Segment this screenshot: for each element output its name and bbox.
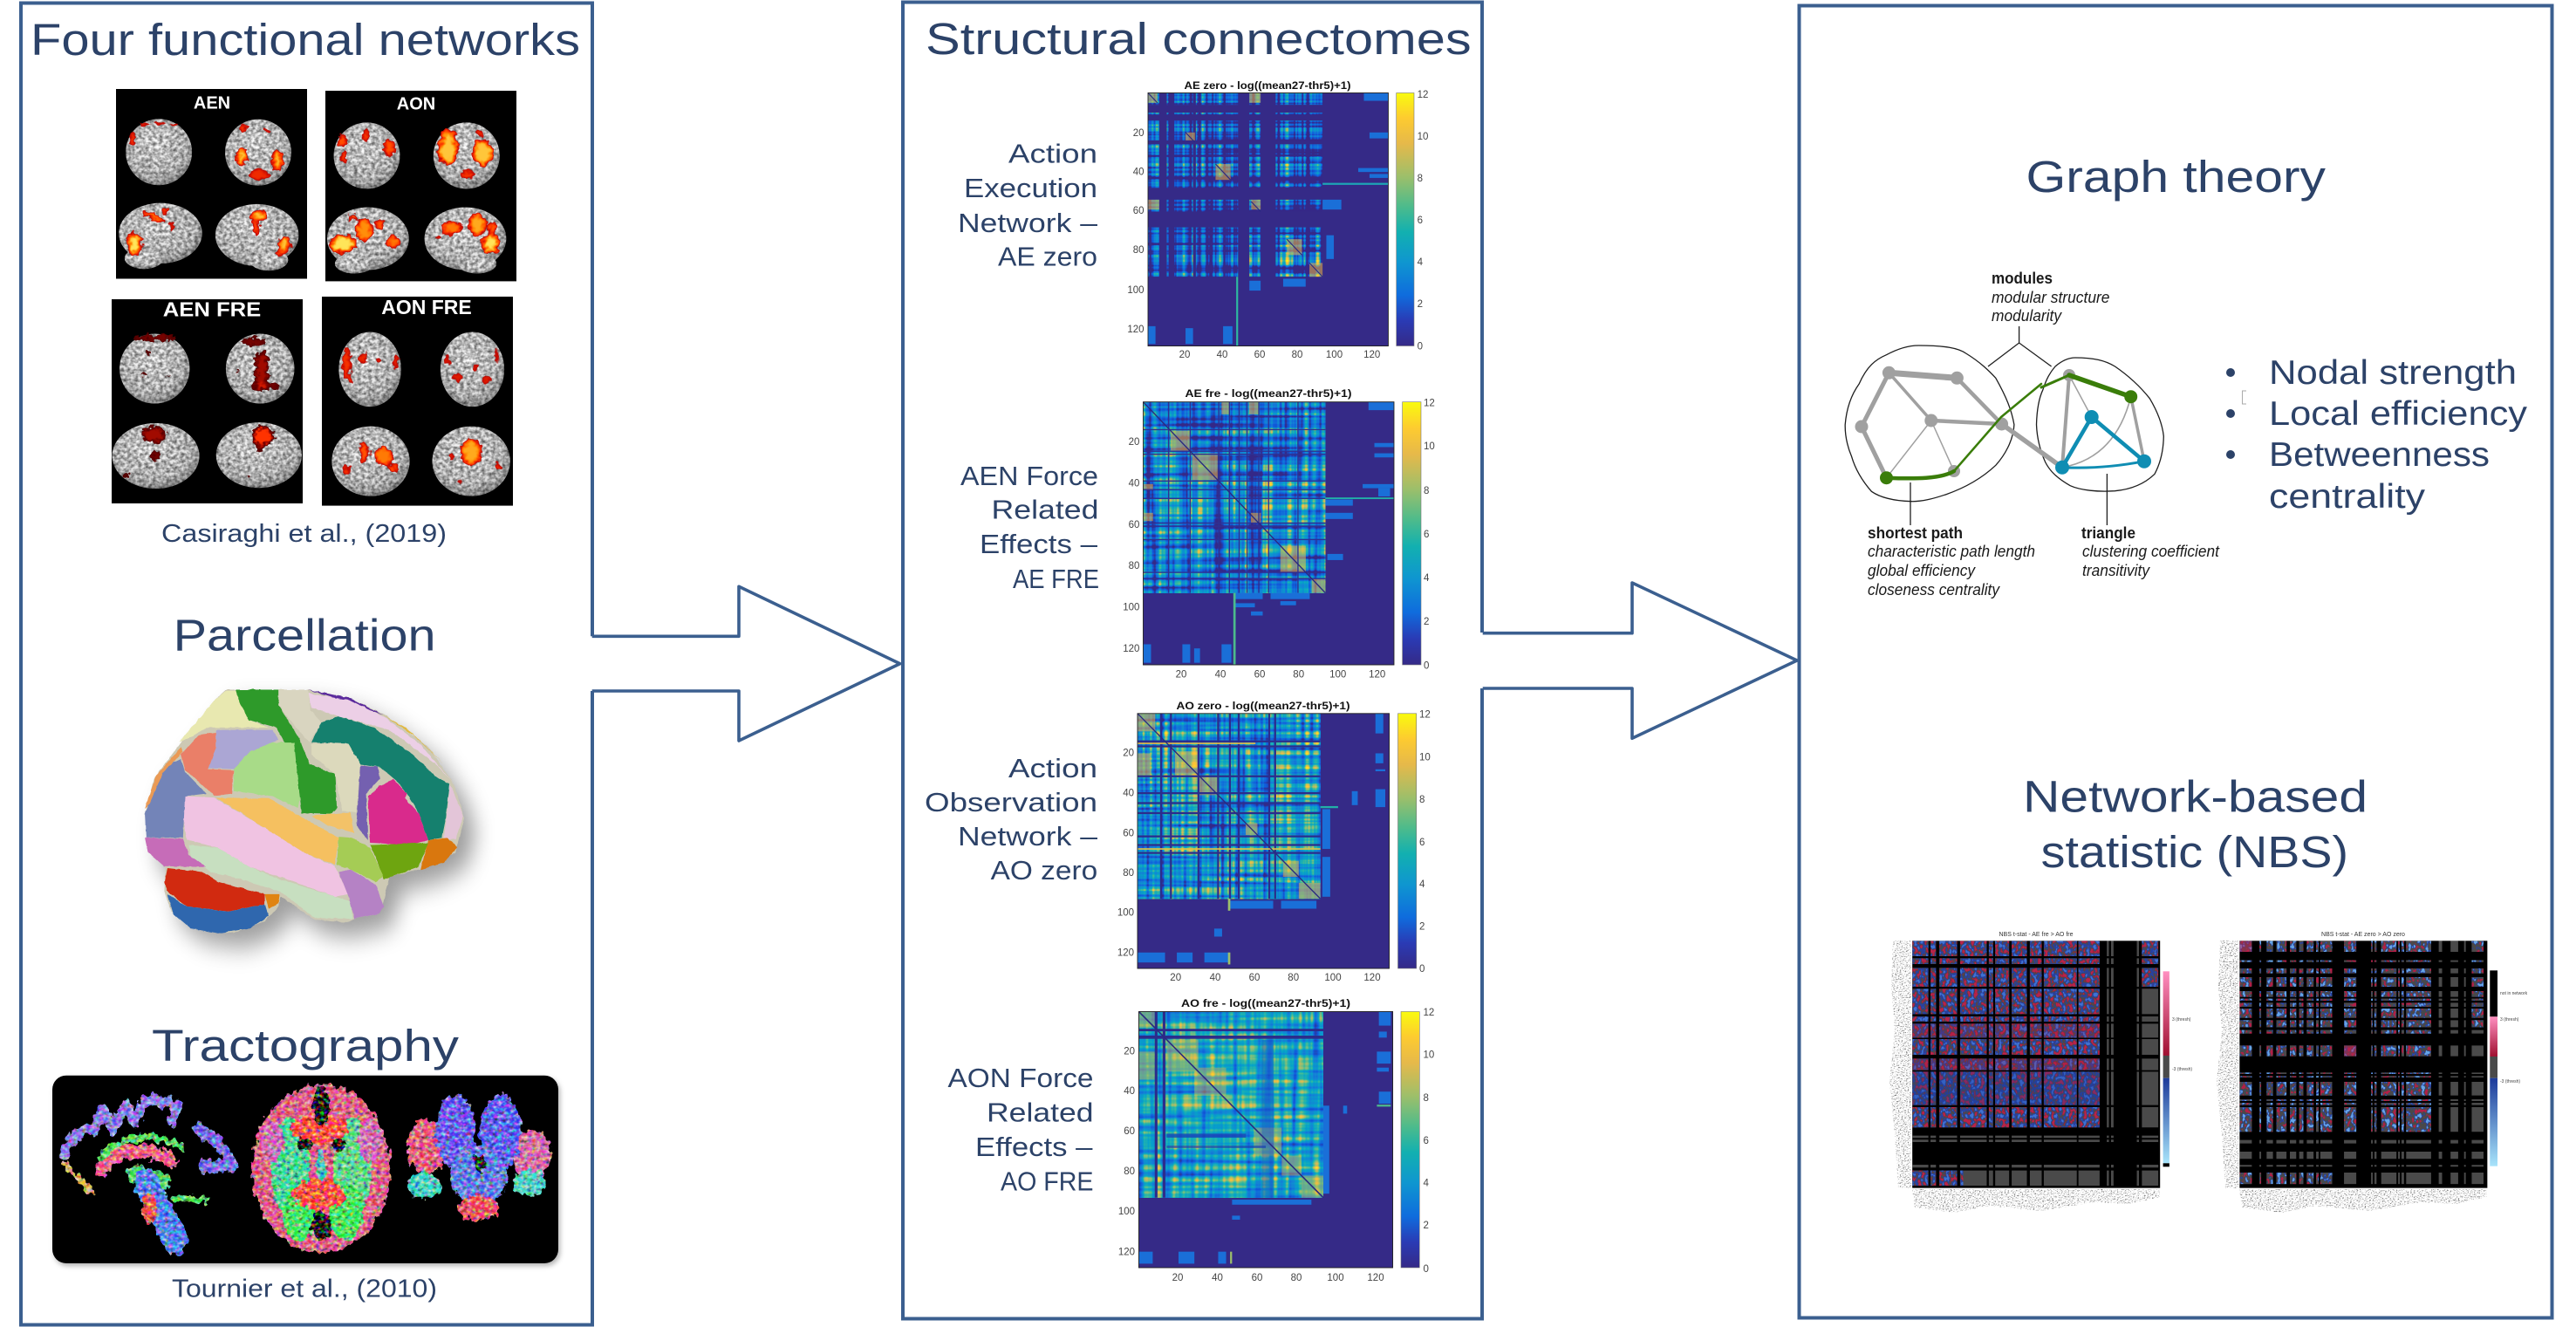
bullet list: graph metrics: Nodal strength <box>2269 354 2517 392</box>
diagram: graph measures: triangle <box>2081 524 2135 542</box>
image: AON FRE brain activation: AON FRE <box>381 296 472 318</box>
heading: Network-based statistic (NBS): statistic (NBS) <box>2041 827 2348 877</box>
label: AO zero: Network – <box>958 821 1098 852</box>
label: AO FRE: Related <box>987 1098 1094 1128</box>
heading: Tractography: Tractography <box>152 1021 460 1070</box>
diagram: graph measures <box>1845 270 2220 599</box>
chart: AE fre connectivity matrix: 10 <box>1424 441 1435 452</box>
chart: AO fre connectivity matrix: 40 <box>1212 1273 1223 1283</box>
chart: AE zero connectivity matrix: 80 <box>1292 350 1302 360</box>
chart: AE fre connectivity matrix <box>1123 387 1435 681</box>
diagram: graph measures: global efficiency <box>1868 562 1976 579</box>
chart: AE fre connectivity matrix: 0 <box>1424 661 1429 672</box>
chart: AO fre connectivity matrix: 60 <box>1252 1273 1262 1283</box>
image: tractography slices <box>52 1076 558 1263</box>
heading: Parcellation: Parcellation <box>174 611 436 660</box>
chart: AE fre connectivity matrix: 80 <box>1129 561 1139 571</box>
chart: AE zero connectivity matrix: 4 <box>1418 257 1424 268</box>
chart: NBS t-stat AE fre vs AO fre <box>1889 932 2192 1213</box>
chart: AE zero connectivity matrix: 2 <box>1418 299 1423 310</box>
chart: NBS t-stat AE fre vs AO fre: 3 (thresh) <box>2172 1017 2191 1023</box>
chart: AO zero connectivity matrix: 100 <box>1117 908 1134 919</box>
chart: AO zero connectivity matrix: 60 <box>1249 973 1260 983</box>
chart: AE fre connectivity matrix: 4 <box>1424 573 1430 584</box>
chart: AO zero connectivity matrix: 120 <box>1363 973 1381 983</box>
chart: AO zero connectivity matrix: 20 <box>1123 749 1134 759</box>
label: AO FRE <box>947 1063 1094 1197</box>
chart: NBS t-stat AE fre vs AO fre: NBS t-stat - AE fre > AO fre <box>1999 932 2074 938</box>
label: AE FRE: Related <box>991 494 1099 525</box>
arrow: connectomes to analyses <box>1483 583 1797 738</box>
label: AO zero: Observation <box>925 787 1097 817</box>
label: AO FRE: Effects – <box>975 1132 1093 1162</box>
chart: AE fre connectivity matrix: AE fre - log((mean27-thr5)+1) <box>1185 387 1352 400</box>
chart: AE fre connectivity matrix: 20 <box>1176 670 1186 681</box>
image: AON brain activation <box>325 91 516 281</box>
image: AEN FRE brain activation <box>112 298 303 503</box>
chart: NBS t-stat AE fre vs AO fre: -3 (thresh) <box>2172 1067 2192 1072</box>
chart: AE zero connectivity matrix: 40 <box>1133 168 1145 178</box>
bullet list: graph metrics <box>2226 354 2528 516</box>
image: AEN brain activation: AEN <box>194 94 230 113</box>
image: AEN brain activation <box>116 89 307 279</box>
chart: AE zero connectivity matrix: 6 <box>1418 215 1423 226</box>
bullet list: graph metrics: centrality <box>2269 478 2426 516</box>
heading: Network-based statistic (NBS) <box>2023 772 2368 877</box>
chart: AE fre connectivity matrix: 6 <box>1424 530 1429 540</box>
chart: AE zero connectivity matrix: 20 <box>1133 128 1145 139</box>
chart: AE zero connectivity matrix: 60 <box>1254 350 1265 360</box>
chart: AO zero connectivity matrix: 40 <box>1210 973 1220 983</box>
chart: AO zero connectivity matrix: 4 <box>1419 879 1425 890</box>
chart: AE zero connectivity matrix: 40 <box>1217 350 1227 360</box>
chart: AO fre connectivity matrix: 80 <box>1124 1166 1135 1177</box>
diagram: graph measures: transitivity <box>2082 562 2150 579</box>
chart: AE fre connectivity matrix: 40 <box>1129 479 1139 489</box>
chart: AO zero connectivity matrix: 2 <box>1419 922 1425 933</box>
chart: AE fre connectivity matrix: 80 <box>1293 670 1304 681</box>
chart: AO fre connectivity matrix: 8 <box>1424 1093 1429 1104</box>
chart: AE fre connectivity matrix: 100 <box>1329 670 1346 681</box>
chart: AO zero connectivity matrix: 80 <box>1288 973 1299 983</box>
label: AO zero <box>925 753 1098 886</box>
heading: Structural connectomes: Structural connectomes <box>926 14 1472 64</box>
chart: AO fre connectivity matrix: 2 <box>1424 1221 1429 1231</box>
diagram: graph measures: modules <box>1992 270 2053 287</box>
chart: AE zero connectivity matrix: 120 <box>1127 325 1145 335</box>
label: AE zero: Action <box>1008 139 1097 169</box>
label: AE FRE <box>960 461 1099 594</box>
chart: AE fre connectivity matrix: 120 <box>1369 670 1385 681</box>
chart: AE zero connectivity matrix: 8 <box>1418 174 1423 184</box>
arrow: inputs to connectomes <box>592 586 900 741</box>
chart: AO fre connectivity matrix: 100 <box>1327 1273 1344 1283</box>
chart: AO zero connectivity matrix: 8 <box>1419 795 1425 805</box>
chart: AE zero connectivity matrix: 100 <box>1127 285 1145 296</box>
chart: AO zero connectivity matrix: 120 <box>1117 947 1134 958</box>
chart: NBS t-stat AE zero vs AO zero <box>2217 932 2528 1213</box>
image: AEN FRE brain activation: AEN FRE <box>163 298 261 320</box>
diagram: graph measures: shortest path <box>1868 524 1963 542</box>
chart: AO fre connectivity matrix: 120 <box>1118 1248 1135 1258</box>
label: AE zero: Network – <box>958 208 1098 238</box>
chart: AO fre connectivity matrix: 100 <box>1118 1207 1135 1217</box>
diagram: graph measures: characteristic path length <box>1868 543 2035 560</box>
chart: AO fre connectivity matrix: 10 <box>1424 1050 1434 1061</box>
citation: Tournier: Tournier et al., (2010) <box>172 1276 437 1303</box>
chart: AO fre connectivity matrix: 60 <box>1124 1126 1135 1137</box>
chart: AO zero connectivity matrix: 10 <box>1419 752 1431 763</box>
chart: AE zero connectivity matrix: 120 <box>1363 350 1380 360</box>
label: AO FRE: AO FRE <box>1001 1166 1094 1197</box>
label: AE FRE: AEN Force <box>960 461 1098 491</box>
chart: AO fre connectivity matrix: 40 <box>1124 1086 1135 1097</box>
chart: AE zero connectivity matrix: 80 <box>1133 245 1145 256</box>
chart: AE fre connectivity matrix: 20 <box>1129 437 1139 448</box>
chart: NBS t-stat AE zero vs AO zero: NBS t-stat - AE zero > AO zero <box>2321 932 2405 938</box>
chart: AE fre connectivity matrix: 60 <box>1254 670 1265 681</box>
bullet list: graph metrics: Betweenness <box>2269 436 2490 474</box>
chart: AO zero connectivity matrix: 6 <box>1419 838 1425 848</box>
label: AE FRE: AE FRE <box>1013 564 1099 594</box>
chart: AO fre connectivity matrix: 20 <box>1172 1273 1183 1283</box>
panel: structural connectomes <box>903 2 1482 1319</box>
chart: AO fre connectivity matrix: 120 <box>1367 1273 1384 1283</box>
chart: AO zero connectivity matrix: 0 <box>1419 964 1425 975</box>
chart: AO fre connectivity matrix: 0 <box>1424 1264 1429 1275</box>
chart: NBS t-stat AE zero vs AO zero: not in network <box>2500 991 2528 996</box>
chart: AE fre connectivity matrix: 2 <box>1424 617 1429 627</box>
heading: Network-based statistic (NBS): Network-based <box>2023 772 2368 822</box>
chart: AE zero connectivity matrix <box>1127 79 1428 360</box>
image: AON brain activation: AON <box>397 95 435 114</box>
chart: NBS t-stat AE zero vs AO zero: -3 (thresh) <box>2500 1079 2520 1084</box>
chart: AE zero connectivity matrix: 20 <box>1179 350 1190 360</box>
chart: AO zero connectivity matrix: 100 <box>1324 973 1342 983</box>
panel: graph theory and NBS <box>1799 5 2552 1317</box>
chart: AE fre connectivity matrix: 120 <box>1123 644 1139 654</box>
label: AO zero: AO zero <box>991 855 1097 886</box>
image: parcellated brain atlas <box>145 690 476 948</box>
chart: AO zero connectivity matrix: 40 <box>1123 789 1134 799</box>
chart: AO fre connectivity matrix: 6 <box>1424 1136 1429 1146</box>
chart: AO zero connectivity matrix: 80 <box>1123 868 1134 879</box>
image: AON FRE brain activation <box>322 296 513 506</box>
chart: AE zero connectivity matrix: 12 <box>1418 90 1428 100</box>
chart: AO fre connectivity matrix: 12 <box>1424 1008 1434 1018</box>
chart: AO fre connectivity matrix: 4 <box>1424 1179 1429 1189</box>
chart: AE zero connectivity matrix: AE zero - log((mean27-thr5)+1) <box>1185 79 1350 92</box>
diagram: graph measures: modularity <box>1992 307 2062 325</box>
chart: AE fre connectivity matrix: 60 <box>1129 520 1139 530</box>
chart: AE fre connectivity matrix: 8 <box>1424 486 1429 496</box>
chart: AO zero connectivity matrix: 60 <box>1123 828 1134 838</box>
chart: AO fre connectivity matrix: 80 <box>1291 1273 1302 1283</box>
bullet list: graph metrics: Local efficiency <box>2269 395 2528 433</box>
chart: AE zero connectivity matrix: 100 <box>1326 350 1343 360</box>
chart: AO zero connectivity matrix: 20 <box>1170 973 1181 983</box>
diagram: graph measures: closeness centrality <box>1868 581 2000 599</box>
diagram: graph measures: modular structure <box>1992 289 2109 306</box>
heading: Graph theory: Graph theory <box>2026 152 2327 202</box>
heading: Four functional networks: Four functional networks <box>31 15 580 65</box>
chart: NBS t-stat AE zero vs AO zero: 3 (thresh) <box>2500 1017 2519 1023</box>
chart: AO zero connectivity matrix: AO zero - log((mean27-thr5)+1) <box>1176 700 1350 712</box>
diagram: graph measures: clustering coefficient <box>2082 543 2220 560</box>
chart: AE fre connectivity matrix: 40 <box>1215 670 1226 681</box>
chart: AO fre connectivity matrix: AO fre - log((mean27-thr5)+1) <box>1181 997 1350 1009</box>
chart: AO fre connectivity matrix: 20 <box>1124 1046 1135 1057</box>
chart: AO fre connectivity matrix <box>1118 997 1434 1283</box>
chart: AO zero connectivity matrix <box>1117 700 1431 983</box>
chart: AE zero connectivity matrix: 10 <box>1418 132 1428 142</box>
label: AE zero <box>958 139 1098 272</box>
chart: AE fre connectivity matrix: 100 <box>1123 602 1139 612</box>
chart: AO zero connectivity matrix: 12 <box>1419 710 1431 721</box>
citation: Casiraghi: Casiraghi et al., (2019) <box>161 520 447 548</box>
label: AE zero: Execution <box>964 173 1097 203</box>
chart: AE zero connectivity matrix: 60 <box>1133 206 1145 216</box>
label: AO zero: Action <box>1008 753 1097 783</box>
chart: AE fre connectivity matrix: 12 <box>1424 399 1435 409</box>
label: AO FRE: AON Force <box>947 1063 1094 1093</box>
label: AE zero: AE zero <box>998 241 1097 272</box>
panel: inputs, functional networks, parcellation, tractography <box>21 3 592 1324</box>
chart: AE zero connectivity matrix: 0 <box>1418 342 1423 352</box>
label: AE FRE: Effects – <box>980 529 1098 559</box>
